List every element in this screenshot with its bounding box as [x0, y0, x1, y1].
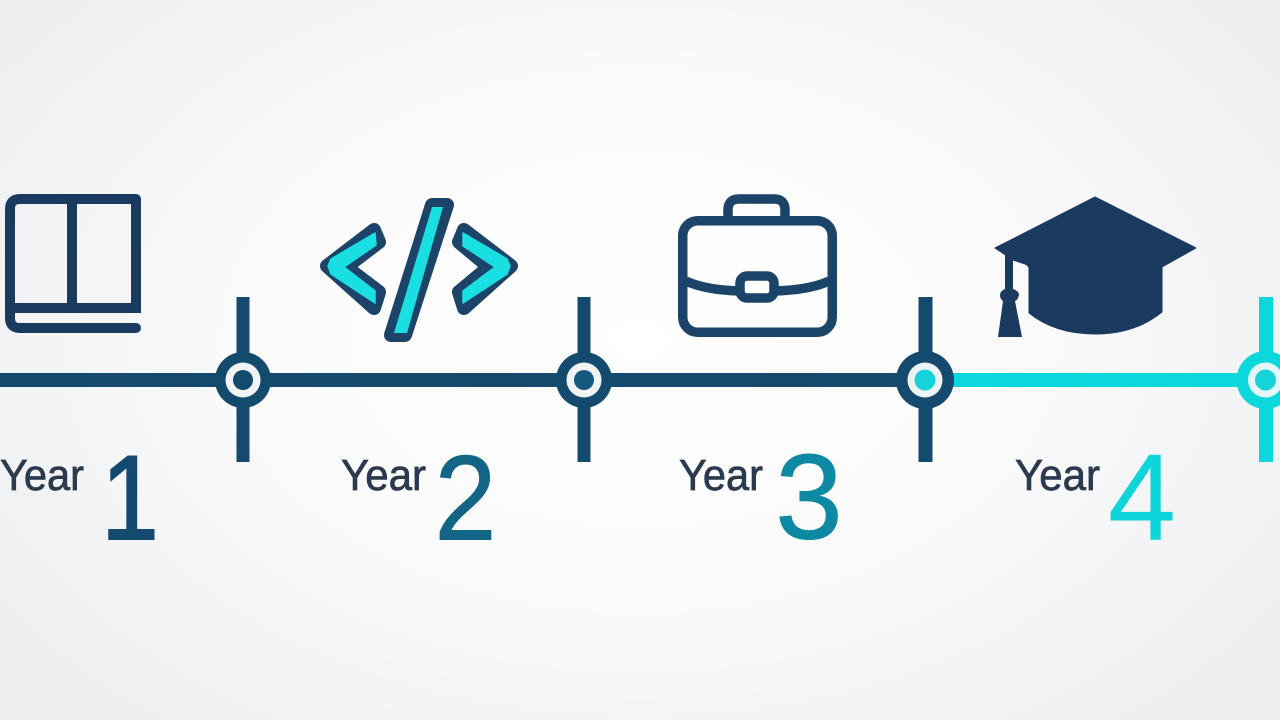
label: Year 3: 3	[775, 428, 843, 564]
label: Year 2: 2	[435, 430, 496, 566]
label: Year 1: 1	[101, 431, 159, 565]
icon: open book (Year 1)	[10, 199, 136, 328]
timeline node: end of Year 3	[896, 297, 954, 462]
label: Year 4	[1015, 430, 1176, 567]
label: Year 3: Year	[679, 451, 763, 500]
slash	[391, 205, 447, 335]
right chevron	[459, 230, 511, 308]
label: Year 1: Year	[0, 451, 84, 500]
timeline node: end of Year 1	[215, 297, 271, 462]
icon: briefcase (Year 3)	[683, 199, 832, 332]
label: Year 4: Year	[1015, 451, 1100, 500]
tassel	[998, 250, 1022, 337]
label: Year 2	[341, 430, 496, 566]
left chevron	[327, 230, 379, 308]
label: Year 3	[679, 428, 843, 564]
label: Year 4: 4	[1108, 430, 1176, 567]
timeline node: end of Year 4	[1236, 297, 1280, 462]
mortarboard and cap	[995, 197, 1196, 334]
timeline: connecting lines	[0, 373, 1270, 387]
label: Year 2: Year	[341, 451, 426, 500]
icon: code brackets (Year 2)	[327, 205, 511, 335]
timeline node: end of Year 2	[556, 297, 612, 462]
label: Year 1	[0, 431, 159, 565]
icon: graduation cap (Year 4)	[995, 197, 1196, 337]
